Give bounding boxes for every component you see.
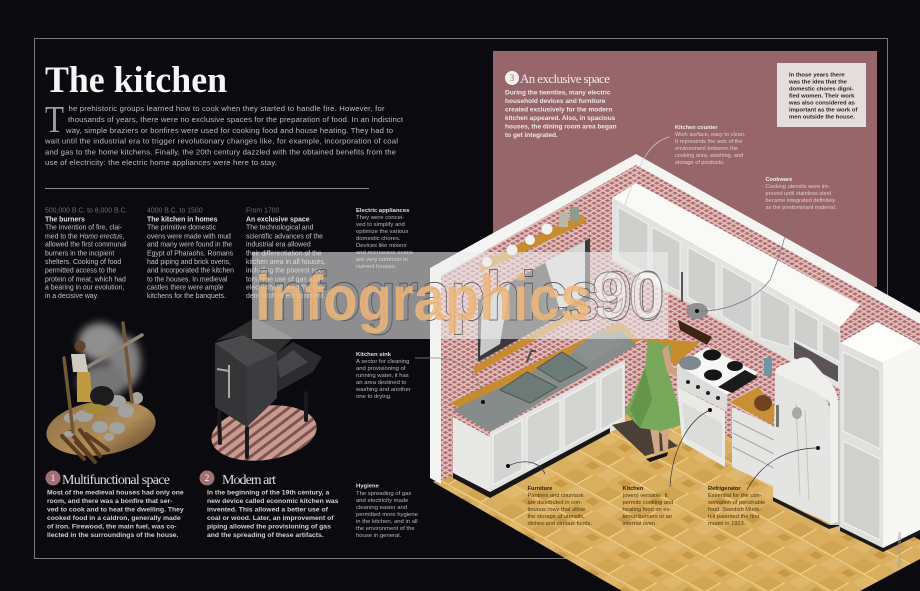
timeline column: the kitchen in homes: castles there were ample [147, 284, 224, 292]
hotplate [277, 342, 322, 392]
number badge 3: 3 [510, 73, 515, 83]
intro paragraph: and gas to the home kitchens. Finally, the 20th century dazzled with the obtained benefits from the [45, 148, 396, 156]
illustration: medieval bonfire [43, 323, 159, 462]
note: kitchen sink: running water, it has [356, 373, 409, 379]
intro paragraph: way, simple braziers or bonfires were used for cooking food and house heating. They had to [65, 126, 393, 135]
timeline column: an exclusive space: kitchen area in all houses, [246, 259, 326, 266]
timeline column: an exclusive space: their differentiation of the [246, 250, 322, 258]
refrigerator [773, 357, 841, 529]
timeline column: the burners: burners in the incipient [45, 250, 114, 258]
stove body [215, 343, 247, 427]
note: electric appliances: current houses. [356, 264, 397, 270]
note: electric appliances: domestic chores. [356, 236, 401, 242]
number badge 1: 1 [51, 473, 55, 483]
floor note: kitchen: (oven) versatile. It [622, 493, 668, 499]
body [47, 490, 184, 539]
floor note: refrigerator: model in 1923. [708, 521, 746, 527]
timeline column: the kitchen in homes [147, 208, 234, 300]
note: electric appliances [356, 208, 413, 270]
timeline column: the burners: in a decisive way. [45, 293, 99, 300]
floor disc [208, 399, 320, 467]
note: kitchen counter: environment between the [675, 146, 738, 152]
leader lines [415, 137, 818, 490]
sink basins [500, 372, 557, 403]
body: household devices and furniture [505, 98, 606, 105]
base cabinets: sink run [450, 322, 640, 498]
floor note: furniture: are distributed in con- [528, 500, 582, 506]
timeline column: an exclusive space: including the poorest sec- [246, 268, 325, 274]
floor note: furniture: Pantries and countask [528, 493, 584, 499]
callout box: was also considered as [788, 100, 856, 106]
section 1: multifunctional space [46, 470, 184, 539]
body: and the spreading of these artifacts. [207, 532, 324, 539]
upper cabinets [612, 183, 860, 389]
ground disc [43, 394, 159, 462]
note: kitchen counter: It represents the axis of the [675, 139, 742, 145]
right wall tiles [636, 165, 920, 500]
note: hygiene: and electricity made [356, 498, 409, 504]
floor note: refrigerator: Refrigerator [708, 486, 741, 492]
floor [433, 380, 920, 591]
credit: ©Sol 90 Images [896, 532, 903, 568]
intro paragraph: use of electricity: the electric home appliances were here to stay. [45, 158, 277, 167]
timeline column: the kitchen in homes: to the houses. In medieval [147, 276, 228, 284]
callout box [777, 63, 866, 127]
floor note: refrigerator: food. Swedish Munk- [708, 507, 761, 513]
timeline column: the burners: a bearing in our evolution, [45, 284, 124, 292]
timeline column: the burners: The invention of fire, clai- [45, 224, 122, 232]
timeline column: the burners: allowed the first communal [45, 242, 127, 248]
cook figure [71, 340, 92, 402]
timeline column: an exclusive space: scientific advances of the [246, 234, 323, 240]
intro paragraph: thousands of years, there were no exclusive spaces for the preparation of food. In an indistinct [68, 115, 404, 124]
note: cookware: Cookware [766, 177, 792, 183]
note: hygiene: house in general. [356, 533, 402, 539]
caldron [90, 386, 114, 406]
woman in green dress [612, 340, 684, 462]
callout dots [481, 309, 820, 468]
intro paragraph [44, 99, 404, 167]
timeline column: an exclusive space: From 1700 [246, 208, 279, 214]
timeline column: the burners: shelters. Cooking of food [45, 259, 121, 266]
note: electric appliances: optimize the various [356, 229, 408, 235]
note: kitchen counter [675, 125, 746, 166]
note: kitchen counter: Kitchen counter [675, 125, 718, 131]
note: hygiene: the environment of the [356, 526, 415, 532]
timeline column: the kitchen in homes: and many were found in the [147, 242, 232, 248]
note: kitchen counter: storage of products. [675, 160, 725, 166]
timeline column: the kitchen in homes: had piping and brick ovens, [147, 259, 231, 266]
title: The kitchen [45, 60, 227, 101]
note: cookware: as the predominant material. [766, 205, 837, 211]
floor note: kitchen: heating food on ex- [622, 507, 671, 513]
mauve panel [493, 51, 877, 287]
wooden posts [64, 323, 142, 432]
heading: Modern art [222, 473, 276, 488]
isometric kitchen [430, 154, 920, 591]
note: electric appliances: are very common in [356, 257, 408, 263]
floor note: kitchen: Kitchen [622, 486, 644, 492]
body [207, 490, 339, 539]
note: kitchen counter: Work surface, easy to clean. [675, 132, 746, 138]
note: hygiene: permitted more hygiene [356, 512, 419, 518]
body: cooked food in a caldron, generally made [47, 515, 181, 522]
body: Most of the medieval houses had only one [47, 490, 184, 496]
tall pantry cupboard [840, 322, 920, 552]
note: kitchen sink: A sector for cleaning [356, 359, 409, 365]
floor note: kitchen: ternal burners or an [622, 514, 672, 520]
timeline column: the kitchen in homes: and incorporated the kitchen [147, 268, 234, 274]
section 3: an exclusive space [505, 71, 617, 139]
smoke [78, 323, 141, 400]
callout box: important as the work of [789, 108, 857, 114]
floor note: furniture [528, 486, 592, 527]
wooden worktop by the stove [640, 338, 700, 366]
floor note: refrigerator: servation of perishable [708, 500, 765, 506]
floor note: refrigerator: tell patented the first [708, 514, 760, 520]
heading: An exclusive space [520, 71, 610, 86]
draining board [573, 330, 626, 362]
intro paragraph: he prehistoric groups learned how to cook when they started to handle fire. However, for [68, 104, 385, 113]
note: kitchen sink: Kitchen sink [356, 352, 392, 358]
floor note: kitchen: permits cooking and [622, 500, 673, 506]
timeline column: an exclusive space: electricity shaped the mo- [246, 284, 325, 292]
timeline column: the burners: med to the Homo erectus, [45, 234, 124, 240]
stove back plate [215, 318, 293, 353]
body: new device called economic kitchen was [207, 498, 339, 505]
body: of iron. Firewood, the main fuel, was co- [47, 524, 177, 530]
note: electric appliances: Electric appliances [356, 208, 410, 214]
body: houses, the dining room area began [505, 124, 617, 130]
note: hygiene: cleaning easier and [356, 505, 407, 511]
body: created exclusively for the modern [505, 106, 612, 114]
note: kitchen sink [355, 352, 411, 400]
left wall tiles [441, 165, 636, 480]
timeline column: the kitchen in homes: ovens were made with mud [147, 234, 231, 240]
section 2: modern art [200, 470, 339, 539]
timeline column: the burners: protein of meat, which had [45, 276, 126, 284]
note: kitchen counter: cooking area, washing, and [675, 153, 743, 159]
body: ved to cook and to heat the dwelling. They [47, 506, 184, 514]
callout box: domestic chores digni- [789, 86, 854, 92]
callout box: men outside the house. [789, 114, 855, 120]
timeline column: an exclusive space [246, 208, 326, 300]
intro paragraph: wait until the industrial era to trigger revolutionary changes like, for example, incorporation of coal [44, 136, 398, 146]
timeline column: the burners: The burners [45, 216, 85, 224]
note: electric appliances: ved to simplify and [356, 222, 405, 228]
body: invented. This allowed a better use of [207, 506, 329, 514]
note: electric appliances: and microwave ovens [356, 250, 413, 256]
timeline column: an exclusive space: The technological and [246, 224, 314, 232]
timeline column: the burners: permitted access to the [45, 268, 116, 274]
timeline column: the burners [45, 208, 127, 300]
wall shelf with crockery [478, 207, 587, 272]
timeline column: the kitchen in homes: Egypt of Pharaohs. Romans [147, 250, 234, 258]
floor note: kitchen: internal oven. [622, 521, 657, 527]
note: cookware [766, 177, 837, 211]
timeline column: the kitchen in homes: The primitive domestic [147, 224, 216, 232]
note: hygiene: The spreading of gas [356, 491, 411, 497]
brown board [678, 320, 712, 345]
floor note: furniture: the storage of utensils, [528, 514, 585, 520]
body: coal or wood. Later, an improvement of [207, 515, 334, 522]
kettle on hob hood [686, 303, 708, 319]
floor note: kitchen [622, 486, 673, 527]
body: room, and there was a bonfire that ser- [47, 498, 172, 505]
drop cap: T [45, 99, 64, 141]
wooden counter and drawers [730, 358, 775, 487]
timeline column: an exclusive space: dern kitchen environment. [246, 293, 325, 300]
note: cookware: became integrated definitely [766, 198, 836, 204]
body: to get integrated. [505, 132, 558, 139]
note: kitchen sink: one to drying. [356, 394, 392, 400]
timeline column: the burners: 500,000 B.C. to 8,000 B.C. [45, 208, 127, 214]
note: electric appliances: They were concei- [356, 215, 404, 221]
note: cookware: Cooking utensils were im- [766, 184, 830, 190]
body: In the beginning of the 19th century, a [207, 490, 329, 496]
callout box: was the idea that the [788, 80, 848, 86]
stove [677, 347, 758, 467]
note: hygiene [356, 484, 419, 539]
oven handle [217, 365, 229, 398]
watermark: 90 [592, 258, 665, 332]
illustration: iron stove [208, 318, 322, 467]
timeline column: an exclusive space: industrial era allowed [246, 242, 311, 248]
number badge 2: 2 [205, 473, 209, 483]
window [473, 238, 590, 374]
timeline column: the kitchen in homes: 4000 B.C. to 1500 [147, 208, 203, 214]
callout box: fied women. Their work [789, 94, 855, 100]
note: cookware: proved until stainless steel [766, 191, 831, 197]
body: llected in the surroundings of the house. [47, 532, 179, 539]
floor note: furniture: Furniture [528, 486, 552, 492]
note: hygiene: Hygiene [356, 484, 380, 490]
stove legs [219, 393, 306, 457]
floor note: furniture: tinuous rows that allow [528, 507, 586, 513]
divider rule [45, 188, 369, 189]
body: During the twenties, many electric [505, 90, 611, 96]
watermark: infographics [255, 264, 591, 334]
body [505, 90, 617, 139]
wall top band [430, 154, 920, 484]
note: kitchen sink: an area destined to [356, 380, 407, 386]
timeline column: the kitchen in homes: The kitchen in homes [147, 216, 218, 224]
firewood pile [62, 430, 108, 462]
timeline column: the kitchen in homes: kitchens for the banquets. [147, 293, 226, 300]
timeline column: an exclusive space: An exclusive space [246, 216, 310, 224]
stones [64, 392, 143, 441]
body: piping allowed the provisioning of gas [207, 524, 331, 530]
note: hygiene: in the kitchen, and in all [356, 519, 418, 525]
heading: Multifunctional space [62, 473, 170, 488]
note: kitchen sink: and provisioning of [356, 366, 406, 372]
watermark: infographics90 [256, 257, 664, 335]
body: kitchen appeared. Also, in spacious [505, 115, 616, 122]
callout box: In those years there [789, 72, 845, 78]
note: kitchen sink: washing and another [355, 387, 411, 393]
floor note: refrigerator [708, 486, 765, 527]
timeline column: an exclusive space: tors. The use of gas and [246, 276, 320, 284]
note: electric appliances: Devices like mixers [356, 243, 406, 249]
floor note: furniture: dishes and various foods. [528, 521, 592, 527]
floor note: refrigerator: Essential for the con- [708, 493, 762, 499]
